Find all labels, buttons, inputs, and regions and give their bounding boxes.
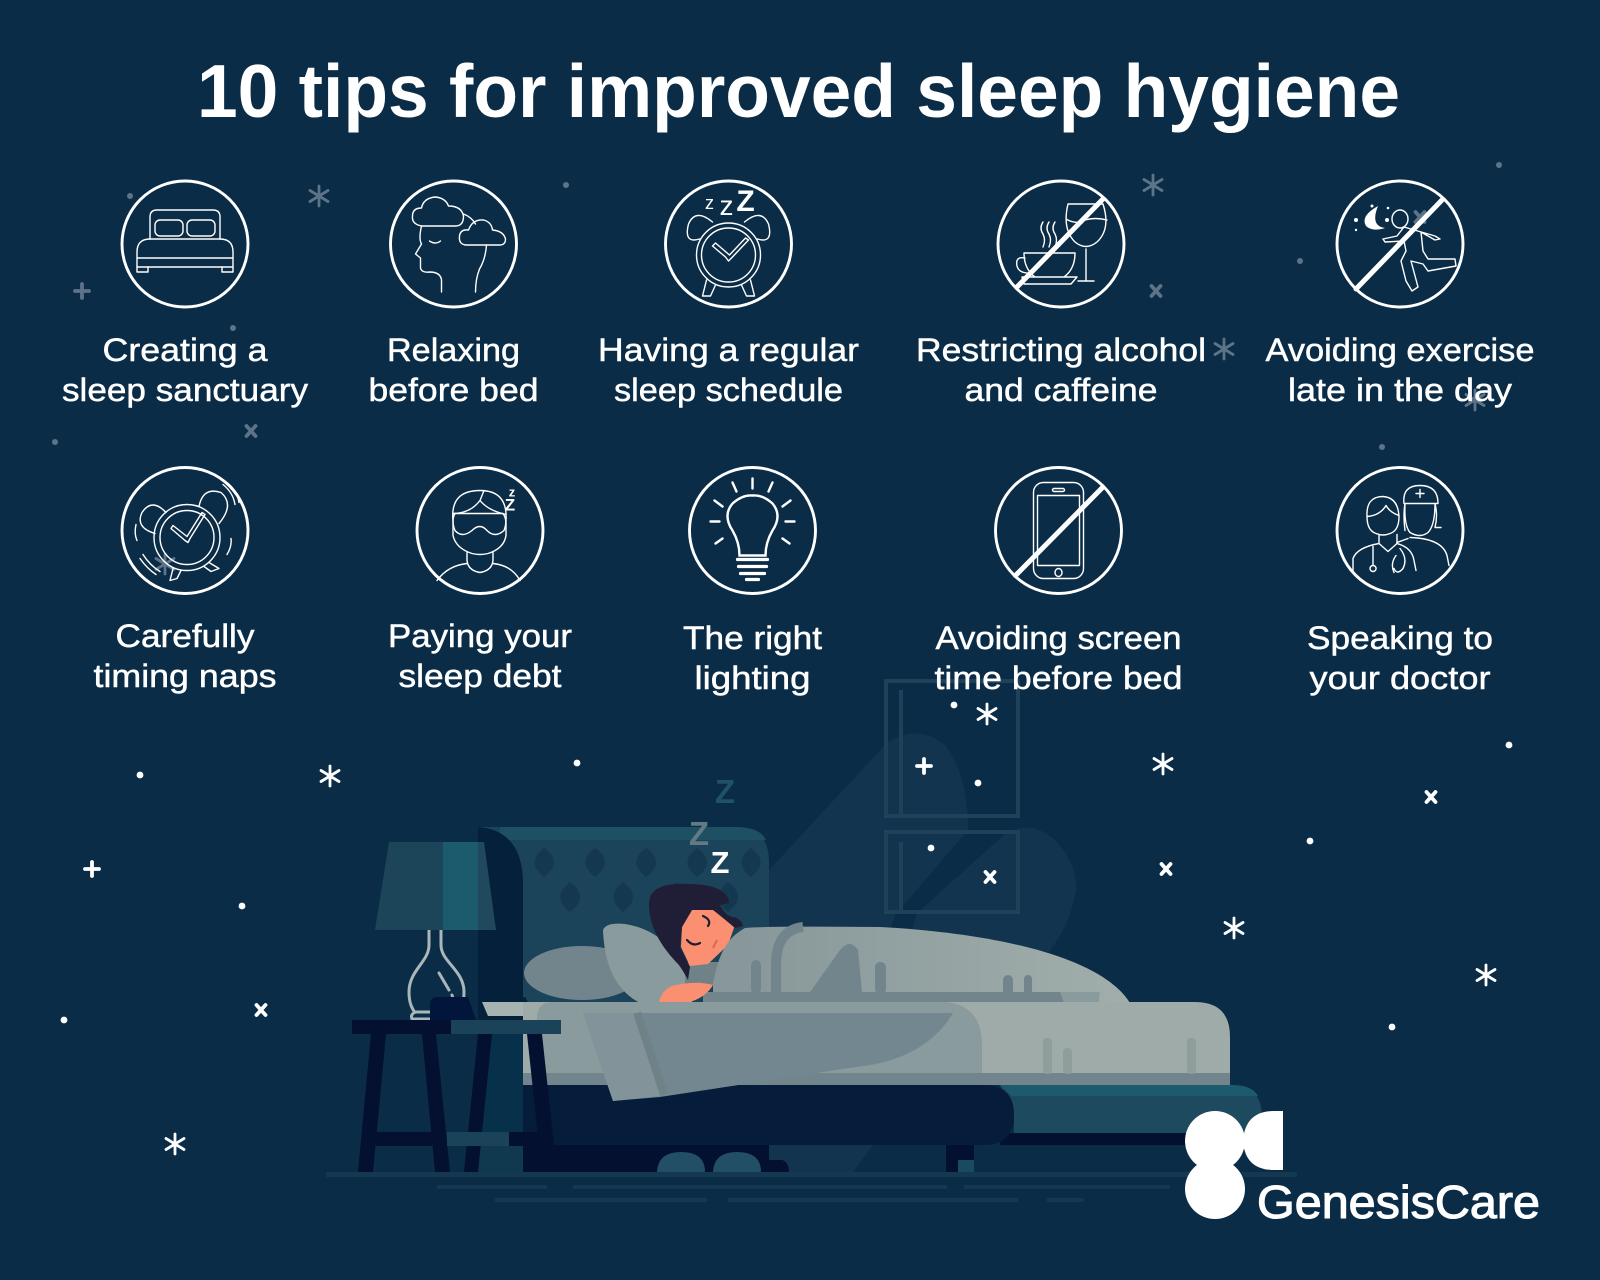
icon: doctor and nurse	[1337, 468, 1463, 594]
label: Having a regular	[598, 332, 859, 368]
mattress and draped duvet	[523, 1002, 1230, 1101]
sleeping Z letters: Z	[715, 773, 735, 810]
label: your doctor	[1310, 660, 1491, 696]
icon: light bulb	[690, 468, 816, 594]
icon: alarm clock with zzz: Z	[736, 185, 755, 218]
label: Creating a	[102, 332, 268, 368]
sleeping Z letters: Z	[711, 845, 730, 880]
logo mark	[1185, 1111, 1283, 1219]
label: Relaxing	[387, 332, 520, 368]
logo: GenesisCare	[1185, 1111, 1540, 1228]
tip 8: the right lighting	[683, 468, 822, 696]
tip 9: avoiding screen time before bed	[934, 468, 1182, 696]
label: late in the day	[1288, 372, 1512, 408]
bedside table	[352, 1020, 561, 1172]
icon: person with sleep mask	[417, 468, 543, 594]
label: Paying your	[388, 618, 572, 654]
icon: runner and moon crossed out	[1337, 181, 1463, 307]
pillows	[524, 924, 692, 1003]
icon: alarm clock with zzz: z	[705, 193, 714, 213]
icon: alarm clock with zzz: z	[720, 190, 734, 221]
label: before bed	[368, 372, 538, 408]
label	[62, 332, 308, 408]
label: timing naps	[94, 658, 276, 694]
tip 1: creating a sleep sanctuary	[62, 181, 308, 408]
icon: person with sleep mask: z	[509, 484, 516, 500]
tip 4: restricting alcohol and caffeine	[916, 181, 1206, 408]
tip 7: paying your sleep debt	[388, 468, 572, 694]
label: and caffeine	[964, 372, 1158, 408]
label	[388, 618, 572, 694]
icon: alarm clock with zzz	[666, 181, 792, 307]
dim background stars	[52, 162, 1502, 574]
sleeping Z letters	[689, 773, 735, 880]
label	[1307, 620, 1493, 696]
duvet over body	[703, 927, 1130, 1003]
bedside objects	[430, 997, 539, 1020]
label: Carefully	[116, 618, 254, 654]
tip 5: avoiding exercise late	[1266, 181, 1534, 408]
illustration: sleeping person in bed	[352, 827, 1262, 1172]
logo wordmark: GenesisCare	[1257, 1176, 1540, 1228]
title: 10 tips for improved sleep hygiene	[197, 49, 1400, 133]
lamp	[375, 842, 496, 1019]
bed frame	[523, 1085, 1262, 1172]
tip 2: relaxing before bed	[368, 181, 538, 408]
label: sleep debt	[398, 658, 562, 694]
icon: head with clouds	[390, 181, 516, 307]
tip 10: speaking to your doctor	[1307, 468, 1493, 696]
label	[934, 620, 1182, 696]
label: sleep schedule	[614, 372, 843, 408]
icon: ringing alarm clock	[122, 468, 248, 594]
wall light cone and windows	[769, 681, 1076, 1172]
bright stars	[61, 702, 1512, 1154]
label: Avoiding screen	[936, 620, 1182, 656]
icon: phone crossed out	[996, 468, 1122, 594]
label: The right	[683, 620, 822, 656]
icon: wine and coffee crossed out	[998, 181, 1124, 307]
label	[1266, 332, 1534, 408]
label: sleep sanctuary	[62, 372, 308, 408]
tip 3: regular sleep schedule	[598, 181, 859, 408]
label: Avoiding exercise	[1266, 332, 1534, 368]
label: Restricting alcohol	[916, 332, 1206, 368]
sleeping Z letters: Z	[689, 815, 709, 852]
label	[368, 332, 538, 408]
icon: bed	[122, 181, 248, 307]
label	[916, 332, 1206, 408]
floor lines	[326, 1172, 1297, 1202]
label: lighting	[694, 660, 810, 696]
arm	[659, 983, 713, 1002]
label: time before bed	[934, 660, 1182, 696]
label	[94, 618, 276, 694]
label	[683, 620, 822, 696]
headboard	[478, 827, 769, 1172]
icon: person with sleep mask: Z	[505, 496, 515, 514]
sleeper: head and arm	[649, 884, 743, 985]
label	[598, 332, 859, 408]
label: Speaking to	[1307, 620, 1493, 656]
tip 6: carefully timing naps	[94, 468, 276, 694]
